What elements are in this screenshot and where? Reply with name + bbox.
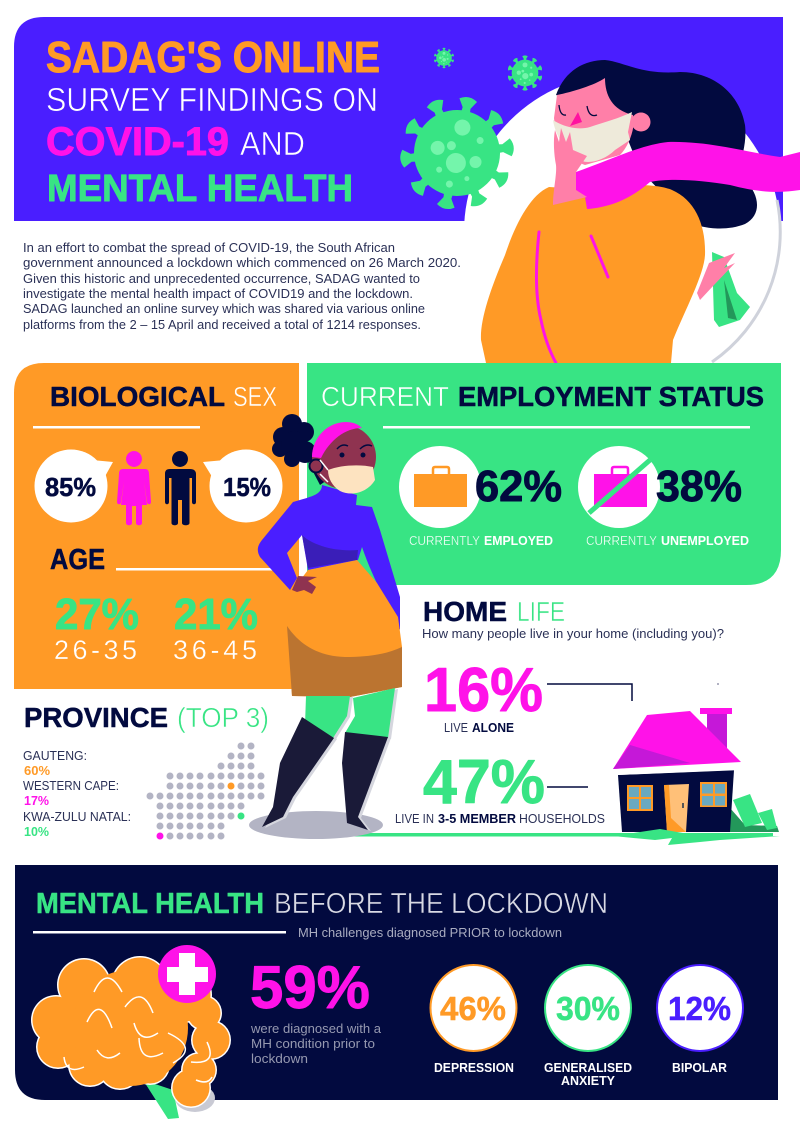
- icon: unemployed briefcase: [578, 446, 660, 528]
- eyes and brows: [337, 445, 372, 458]
- stat: age 26-35: [54, 590, 139, 665]
- province list: [23, 748, 131, 839]
- intro text: platforms from the 2 – 15 April and received a total of 1214 responses.: [23, 317, 421, 332]
- hair: [556, 60, 757, 228]
- description: were diagnosed with a: [250, 1021, 382, 1036]
- heading: province: [24, 702, 269, 733]
- label: 3-5 member households: [395, 811, 605, 826]
- panel: province top 3: [23, 702, 269, 840]
- ground line: [353, 833, 773, 836]
- heading: employment: CURRENT: [321, 381, 449, 412]
- icon: employed briefcase: [399, 446, 481, 528]
- heading: biological sex: BIOLOGICAL: [50, 381, 225, 412]
- icon: house: [613, 683, 780, 845]
- heading: BEFORE THE LOCKDOWN: [274, 888, 608, 920]
- label: 3-5 member households: LIVE IN: [395, 811, 434, 826]
- label: 3-5 member households: 3-5 MEMBER: [438, 811, 517, 826]
- right hand and cloth: [712, 252, 750, 327]
- icon: brain: [31, 956, 231, 1119]
- label: currently unemployed: [586, 534, 749, 548]
- coat seams: [537, 232, 608, 363]
- intro text: SADAG launched an online survey which was shared via various online: [23, 301, 425, 316]
- bubble: 85%: 85%: [45, 472, 96, 502]
- stat: 16%: 16%: [424, 656, 543, 725]
- label: 3-5 member households: HOUSEHOLDS: [519, 811, 605, 826]
- stat: 59%: 59%: [250, 954, 370, 1021]
- bubble: 85%: [34, 450, 113, 522]
- ear: [632, 112, 650, 132]
- description: [250, 1021, 382, 1066]
- stat: generalised anxiety: ANXIETY: [561, 1074, 616, 1088]
- heading: home life: LIFE: [517, 596, 565, 627]
- legs and boots: [262, 688, 395, 830]
- hair bun: [272, 414, 330, 485]
- stat: depression: 46%: [440, 990, 506, 1027]
- icon: small virus: [434, 48, 454, 68]
- heading: province: PROVINCE: [24, 702, 168, 733]
- panel: header: [14, 17, 783, 221]
- heading: home life: HOME: [423, 596, 507, 627]
- dot map of South Africa: [146, 742, 264, 840]
- label: live alone: LIVE: [444, 721, 468, 735]
- label: currently employed: EMPLOYED: [484, 534, 553, 548]
- stat: generalised anxiety: 30%: [556, 990, 620, 1027]
- ground shadow: [249, 811, 383, 839]
- skirt: [287, 560, 402, 697]
- stat: 62%: 62%: [475, 462, 562, 511]
- connector line: live alone: [547, 684, 632, 701]
- stat: age 36-45: 36-45: [173, 635, 257, 665]
- panel: current employment status: [307, 363, 781, 585]
- heading: age: AGE: [50, 544, 105, 576]
- heading: province: (TOP 3): [177, 702, 269, 733]
- description: lockdown: [251, 1051, 308, 1066]
- illustration: standing woman with face mask: [249, 414, 402, 839]
- label: currently employed: [409, 534, 553, 548]
- eyes and nose: [559, 105, 597, 116]
- hand: [553, 128, 587, 205]
- bubble: 15%: 15%: [223, 472, 271, 502]
- panel: home life: [353, 596, 780, 845]
- icon: male figure: [165, 451, 196, 525]
- label: currently employed: CURRENTLY: [409, 534, 481, 548]
- bubble: 15%: [203, 450, 282, 522]
- icon: medium virus: [507, 55, 543, 91]
- sweater: [258, 485, 400, 630]
- face: [554, 78, 634, 165]
- head: [312, 425, 376, 489]
- province list: WESTERN CAPE:: [23, 778, 119, 793]
- province list: 10%: [24, 824, 49, 839]
- title: SURVEY FINDINGS ON: [46, 81, 378, 118]
- stat: age 26-35: 27%: [55, 590, 139, 639]
- stat: age 36-45: [173, 590, 258, 665]
- province list: KWA-ZULU NATAL:: [23, 809, 131, 824]
- label: currently unemployed: CURRENTLY: [586, 534, 658, 548]
- stat: age 36-45: 21%: [174, 590, 258, 639]
- scarf: [576, 142, 800, 209]
- subheading: MH challenges diagnosed PRIOR to lockdown: [298, 926, 562, 940]
- icon: female figure: [117, 451, 151, 525]
- mask: [553, 112, 632, 162]
- province list: 60%: [24, 763, 50, 778]
- connector line: households: [547, 786, 588, 788]
- province list: GAUTENG:: [23, 748, 87, 763]
- mask: [328, 465, 375, 494]
- label: live alone: [444, 721, 514, 735]
- heading: biological sex: SEX: [233, 381, 277, 412]
- intro text: [23, 240, 461, 332]
- icon: medical plus badge: [158, 945, 216, 1003]
- intro text: In an effort to combat the spread of COVID-19, the South African: [23, 240, 395, 255]
- icon: large virus: [389, 85, 525, 221]
- stat: 38%: 38%: [656, 462, 742, 511]
- heading: employment: [321, 381, 764, 412]
- intro text: investigate the mental health impact of COVID19 and the lockdown.: [23, 286, 413, 301]
- heading: home life: [423, 596, 565, 627]
- stat: depression: [430, 965, 516, 1075]
- description: MH condition prior to: [251, 1036, 375, 1051]
- stat: age 26-35: 26-35: [54, 635, 137, 665]
- title: [46, 33, 380, 210]
- stat: depression: DEPRESSION: [434, 1061, 514, 1075]
- heading: employment: EMPLOYMENT STATUS: [458, 381, 764, 412]
- label: currently unemployed: UNEMPLOYED: [661, 534, 749, 548]
- label: live alone: ALONE: [472, 721, 514, 735]
- coat: [481, 185, 705, 363]
- heading: [36, 888, 608, 920]
- title: MENTAL HEALTH: [47, 168, 353, 210]
- intro text: Given this historic and unprecedented occurrence, SADAG wanted to: [23, 271, 420, 286]
- title: AND: [240, 125, 305, 162]
- hand on hip: [292, 576, 317, 594]
- panel: biological sex and age: [14, 363, 299, 689]
- province list: 17%: [24, 793, 49, 808]
- white circle behind the illustration: [464, 74, 780, 390]
- stat: generalised anxiety: GENERALISED: [544, 1061, 632, 1075]
- stat: bipolar: 12%: [668, 990, 731, 1027]
- ear: [310, 460, 322, 472]
- waist: [302, 535, 358, 568]
- stat: bipolar: BIPOLAR: [672, 1061, 727, 1075]
- intro text: government announced a lockdown which commenced on 26 March 2020.: [23, 255, 461, 270]
- stat: 47%: 47%: [423, 748, 545, 817]
- stat: bipolar: [657, 965, 743, 1075]
- title: SADAG'S ONLINE: [46, 33, 380, 82]
- question: How many people live in your home (including you)?: [422, 626, 724, 641]
- panel: mental health before the lockdown: [15, 865, 778, 1119]
- stat: generalised anxiety: [544, 965, 632, 1088]
- illustration: woman with mask sneezing: [481, 60, 800, 363]
- heading: MENTAL HEALTH: [36, 888, 264, 920]
- title: COVID-19: [46, 120, 229, 164]
